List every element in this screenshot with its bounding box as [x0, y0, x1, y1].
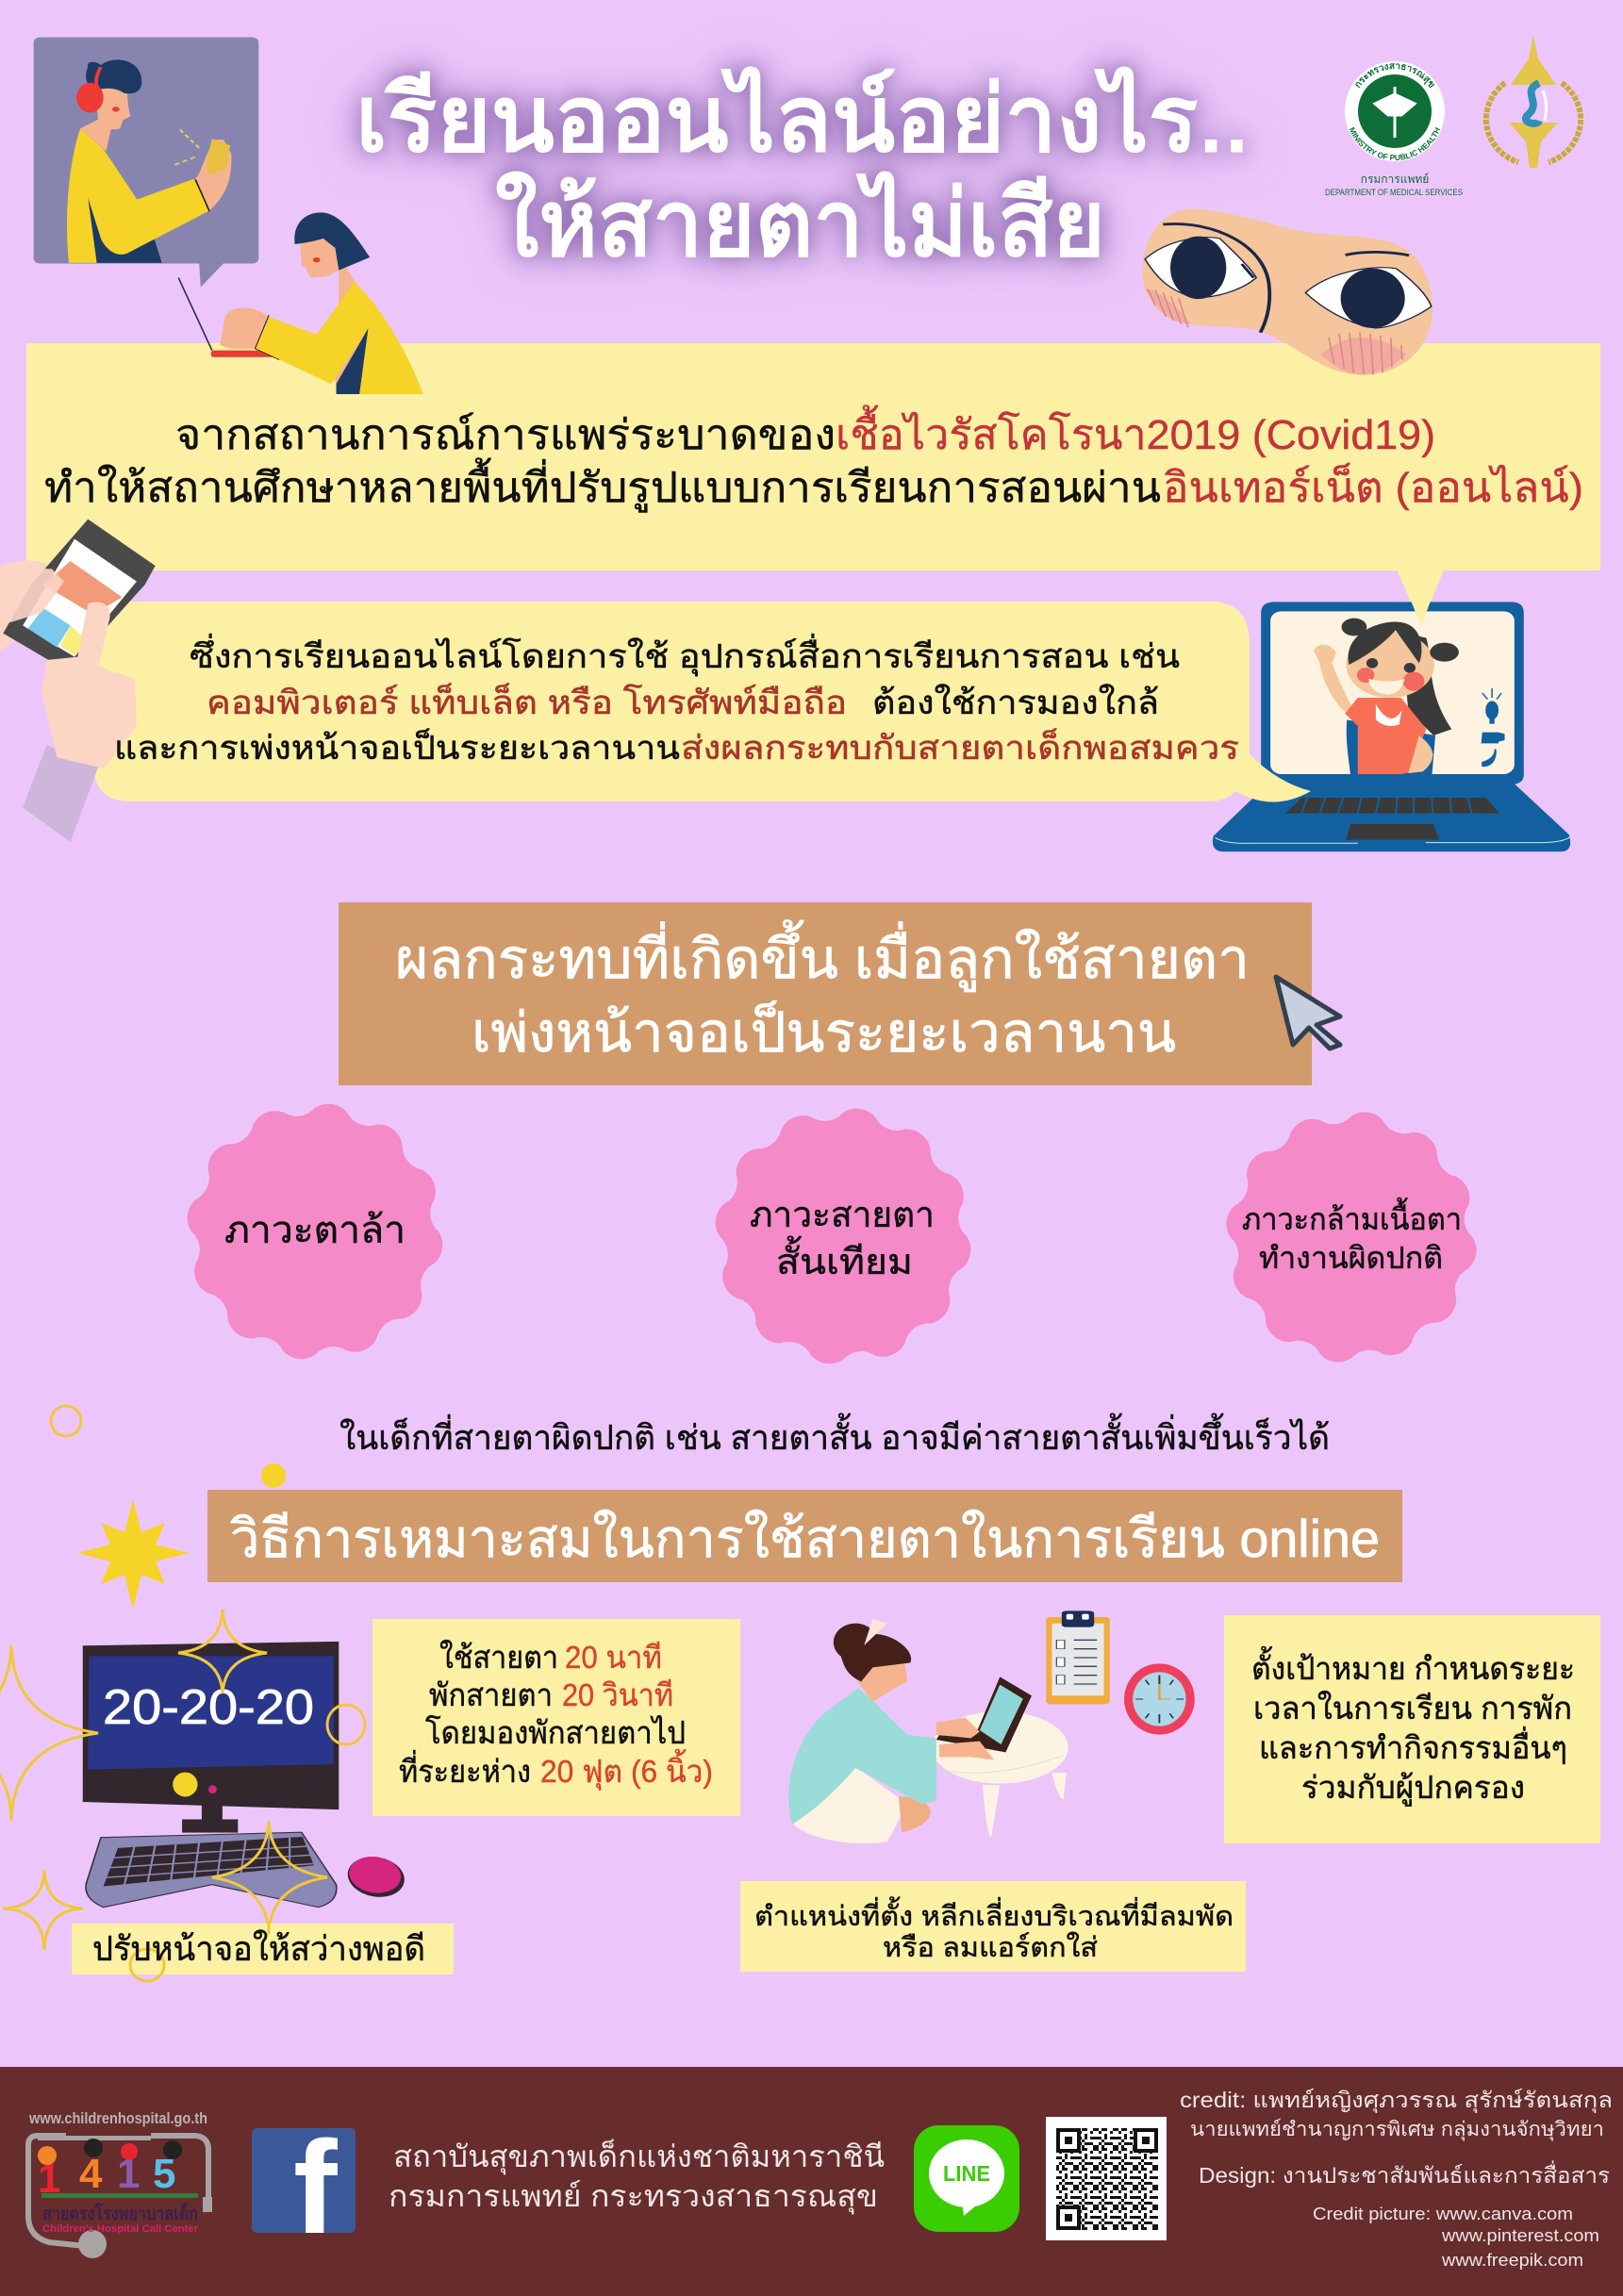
text: note on myopia: ในเด็กที่สายตาผิดปกติ เช่น สายตาสั้น อาจมีค่าสายตาสั้นเพิ่มขึ้นเร็วได้ — [340, 1412, 1330, 1457]
text box: 20-20-20 rule: พักสายตา — [429, 1677, 553, 1712]
heading: effects: เพ่งหน้าจอเป็นระยะเวลานาน — [472, 1000, 1176, 1064]
text box: 20-20-20 rule: ที่ระยะห่าง — [399, 1750, 531, 1789]
footer organisation text: สถาบันสุขภาพเด็กแห่งชาติมหาราชินี — [393, 2139, 885, 2175]
badge: pseudo-myopia: ภาวะสายตา — [750, 1196, 935, 1235]
text box: adjust brightness — [72, 1924, 454, 1981]
panel: second yellow speech bubble — [93, 602, 1311, 801]
intro text: ทำให้สถานศึกษาหลายพื้นที่ปรับรูปแบบการเรียนการสอนผ่าน — [44, 457, 1161, 513]
second bubble text: ส่งผลกระทบกับสายตาเด็กพอสมควร — [681, 728, 1239, 767]
logo: 1415 children's hospital call center: 1 — [117, 2151, 140, 2197]
logo: 1415 children's hospital call center: 4 — [79, 2151, 103, 2197]
QR code — [1046, 2117, 1167, 2240]
logo: 1415 children's hospital call center: สายตรงโรงพยาบาลเด็ก — [42, 2202, 198, 2224]
footer organisation text: กรมการแพทย์ กระทรวงสาธารณสุข — [389, 2179, 878, 2215]
panel: intro yellow speech box — [26, 343, 1600, 626]
illustration: woman studying at low table with clipboard and clock — [788, 1611, 1195, 1843]
intro text: จากสถานการณ์การแพร่ระบาดของ — [175, 412, 836, 458]
logo: 1415 children's hospital call center: 1 — [38, 2156, 60, 2202]
badge: eye muscle dysfunction — [1226, 1112, 1477, 1363]
badge: eye muscle dysfunction: ทำงานผิดปกติ — [1259, 1241, 1443, 1275]
icon: cursor arrow — [1276, 977, 1340, 1049]
text box: seating position: หรือ ลมแอร์ตกใส่ — [883, 1931, 1098, 1963]
illustration: desktop computer showing 20-20-20: 20-20-20 — [103, 1680, 314, 1735]
logo: 1415 children's hospital call center: 5 — [153, 2151, 175, 2197]
credits: www.pinterest.com — [1441, 2226, 1599, 2245]
logo: 1415 children's hospital call center — [28, 2109, 212, 2258]
text box: 20-20-20 rule: ใช้สายตา — [439, 1640, 558, 1675]
decorative star and dots — [51, 1406, 286, 1610]
illustration: desktop computer showing 20-20-20 — [83, 1642, 416, 1908]
badge: pseudo-myopia — [716, 1109, 970, 1363]
second bubble text — [114, 634, 1239, 767]
credits: www.freepik.com — [1441, 2251, 1583, 2270]
text box: 20-20-20 rule: โดยมองพักสายตาไป — [425, 1715, 686, 1750]
credits — [1180, 2088, 1613, 2270]
icon: facebook — [252, 2113, 356, 2261]
logo: 1415 children's hospital call center: www.childrenhospital.go.th — [28, 2109, 207, 2127]
illustration: pair of eyes — [1142, 208, 1433, 374]
heading: proper eye use — [207, 1490, 1402, 1582]
illustration: laptop with waving girl — [1213, 602, 1571, 851]
credits: Credit picture: www.canva.com — [1313, 2205, 1573, 2223]
heading: proper eye use: วิธีการเหมาะสมในการใช้สายตาในการเรียน online — [230, 1509, 1380, 1568]
text box: set goals — [1224, 1615, 1600, 1843]
logo: ministry of public health: MINISTRY OF PUBLIC HEALTH — [1349, 126, 1441, 160]
logo: 1415 children's hospital call center: Children's Hospital Call Center — [42, 2223, 199, 2235]
title — [356, 67, 1250, 275]
logo: ministry of public health — [1325, 61, 1463, 198]
text box: adjust brightness: ปรับหน้าจอให้สว่างพอดี — [92, 1929, 425, 1968]
text box: set goals: ตั้งเป้าหมาย กำหนดระยะ — [1251, 1646, 1575, 1686]
second bubble text: คอมพิวเตอร์ แท็บเล็ต หรือ โทรศัพท์มือถือ — [207, 683, 847, 721]
illustration: hand holding phone — [0, 520, 156, 842]
text box: 20-20-20 rule: 20 วินาที — [562, 1677, 673, 1712]
badge: eye strain: ภาวะตาล้า — [224, 1210, 406, 1251]
heading: effects — [339, 902, 1312, 1085]
logo: department of medical services emblem — [1486, 36, 1581, 168]
intro text: อินเทอร์เน็ต (ออนไลน์) — [1163, 463, 1583, 511]
credits: Design: งานประชาสัมพันธ์และการสื่อสาร — [1199, 2160, 1610, 2188]
intro text — [44, 405, 1583, 513]
credits: credit: แพทย์หญิงศุภวรรณ สุรักษ์รัตนสกุล — [1180, 2088, 1613, 2113]
title: ให้สายตาไม่เสีย — [495, 172, 1105, 275]
footer organisation text — [389, 2139, 885, 2215]
text box: set goals: เวลาในการเรียน การพัก — [1253, 1691, 1572, 1726]
second bubble text: ซึ่งการเรียนออนไลน์โดยการใช้ อุปกรณ์สื่อการเรียนการสอน เช่น — [190, 634, 1180, 676]
credits: นายแพทย์ชำนาญการพิเศษ กลุ่มงานจักษุวิทยา — [1190, 2118, 1604, 2141]
badge: eye strain — [188, 1104, 442, 1359]
logo: ministry of public health: กรมการแพทย์ — [1361, 173, 1429, 186]
title: เรียนออนไลน์อย่างไร.. — [356, 67, 1250, 171]
logo: ministry of public health: DEPARTMENT OF MEDICAL SERVICES — [1325, 188, 1463, 198]
second bubble text: ต้องใช้การมองใกล้ — [872, 684, 1159, 721]
text box: 20-20-20 rule: 20 นาที — [565, 1640, 662, 1675]
icon: facebook: f — [293, 2113, 338, 2261]
illustration: man with headphones in speech bubble — [34, 38, 258, 287]
logo: ministry of public health: กระทรวงสาธารณสุข — [1355, 62, 1435, 89]
badge: pseudo-myopia: สั้นเทียม — [776, 1235, 913, 1282]
badge: eye muscle dysfunction: ภาวะกล้ามเนื้อตา — [1242, 1198, 1462, 1236]
intro text: เชื้อไวรัสโคโรนา2019 (Covid19) — [836, 405, 1435, 458]
text box: 20-20-20 rule: 20 ฟุต (6 นิ้ว) — [540, 1749, 713, 1791]
text box: set goals: และการทำกิจกรรมอื่นๆ — [1259, 1726, 1567, 1765]
top bubble tail overlapping laptop — [1397, 566, 1444, 626]
footer band — [0, 2067, 1623, 2296]
text box: seating position — [740, 1881, 1246, 1972]
text box: set goals: ร่วมกับผู้ปกครอง — [1301, 1770, 1525, 1807]
icon: line: LINE — [943, 2161, 990, 2186]
text box: seating position: ตำแหน่งที่ตั้ง หลีกเลี่ยงบริเวณที่มีลมพัด — [754, 1896, 1234, 1932]
text box: 20-20-20 rule — [373, 1619, 740, 1816]
heading: effects: ผลกระทบที่เกิดขึ้น เมื่อลูกใช้สายตา — [395, 920, 1250, 992]
decorative outline stars — [0, 1610, 365, 1950]
illustration: woman typing on laptop — [178, 212, 423, 394]
icon: line — [914, 2125, 1019, 2232]
second bubble text: และการเพ่งหน้าจอเป็นระยะเวลานาน — [114, 728, 680, 767]
